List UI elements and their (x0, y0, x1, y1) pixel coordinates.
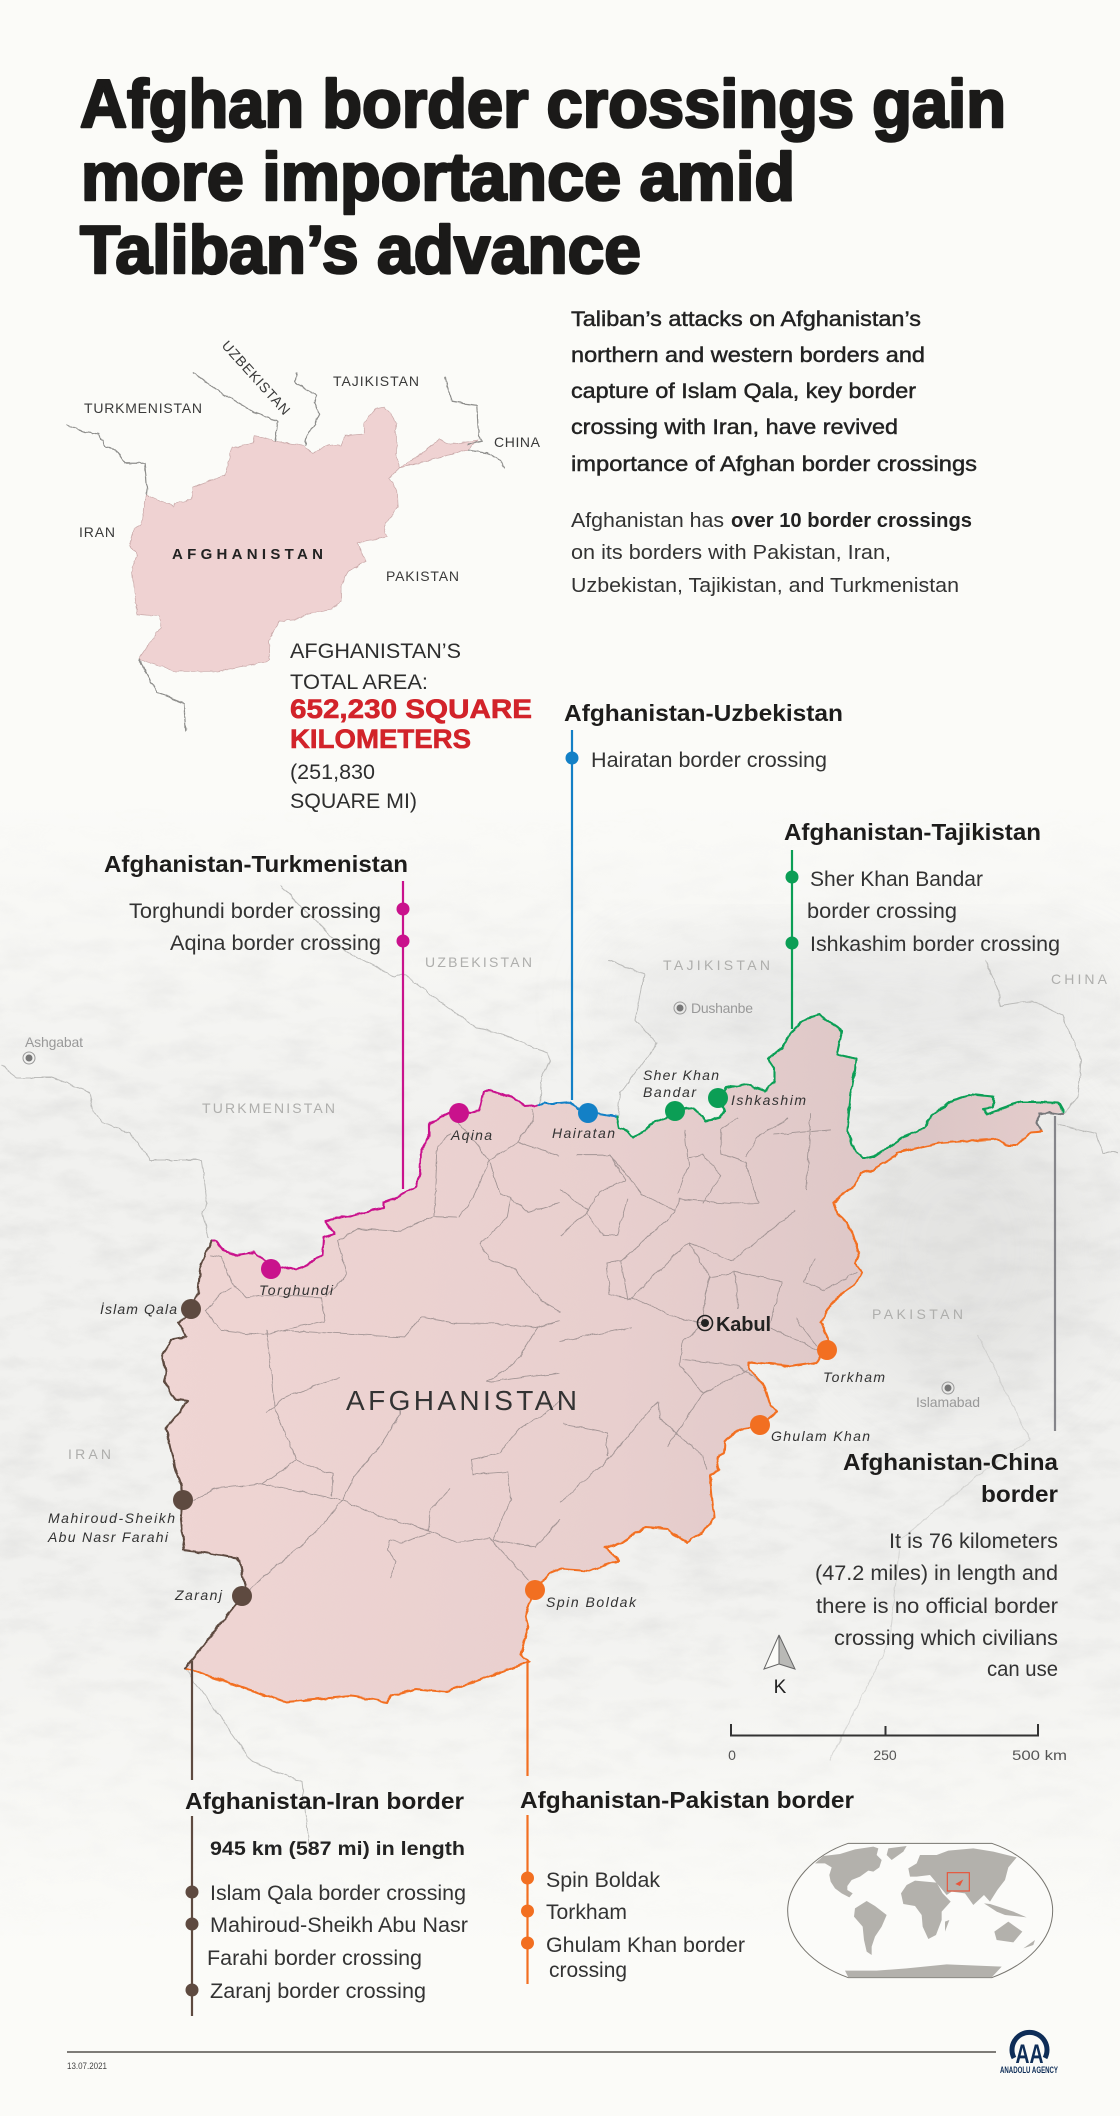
legend: Afghanistan-Iran border: Farahi border crossing (207, 1947, 422, 1970)
Anadolu Agency logo: AA (1016, 2039, 1044, 2069)
total area callout (290, 639, 532, 813)
scale bar: 0 (728, 1747, 736, 1763)
map country labels (68, 954, 1108, 1462)
crossing labels on map: Torkham (823, 1369, 885, 1385)
crossing labels on map: Hairatan (552, 1125, 615, 1141)
leader lines (192, 730, 1055, 2016)
legend: Afghanistan-China border (815, 1449, 1058, 1681)
map country labels: AFGHANISTAN (346, 1385, 577, 1416)
legend: Afghanistan-Pakistan border: Ghulam Khan border (546, 1934, 745, 1957)
legend: Afghanistan-Tajikistan (784, 819, 1060, 956)
title: more importance amid (81, 139, 795, 215)
capital cities: Dushanbe (691, 1000, 753, 1016)
map background terrain (0, 904, 1120, 1794)
border: Afghanistan-Tajikistan (617, 1015, 1063, 1157)
legend: Afghanistan-Uzbekistan (564, 700, 843, 772)
intro text bold: importance of Afghan border crossings (571, 453, 977, 476)
border: Afghanistan-Pakistan (185, 1131, 1042, 1702)
crossing labels on map: Torghundi (259, 1282, 334, 1298)
title (80, 66, 1006, 288)
map country labels: CHINA (1051, 971, 1108, 987)
locator map of Afghanistan: IRAN (79, 524, 115, 540)
date: 13.07.2021 (67, 2061, 107, 2072)
scale bar: 500 km (1012, 1747, 1067, 1763)
capital cities (23, 1000, 980, 1410)
total area callout: SQUARE MI) (290, 789, 417, 813)
legend: Afghanistan-Tajikistan: Sher Khan Bandar (810, 868, 983, 891)
legend: Afghanistan-Tajikistan: Ishkashim border crossing (810, 933, 1060, 956)
capital cities: Kabul (716, 1314, 771, 1336)
intro text regular (571, 510, 972, 597)
legend: Afghanistan-Pakistan border: Torkham (546, 1901, 627, 1924)
border: Afghanistan-China (1037, 1112, 1063, 1131)
total area callout: AFGHANISTAN’S (290, 639, 461, 663)
legend: Afghanistan-China border: can use (987, 1658, 1058, 1681)
legend: Afghanistan-China border: crossing which civilians (834, 1627, 1058, 1650)
locator map of Afghanistan: UZBEKISTAN (219, 337, 294, 418)
title: Afghan border crossings gain (80, 66, 1006, 142)
legend: Afghanistan-China border: border (981, 1481, 1058, 1507)
legend: Afghanistan-Pakistan border: Afghanistan-Pakistan border (520, 1787, 854, 1813)
crossing markers on map (173, 1088, 837, 1606)
neighbouring country borders (2, 885, 1118, 1844)
legend: Afghanistan-China border: It is 76 kilometers (889, 1530, 1058, 1553)
crossing labels on map: Mahiroud-Sheikh (48, 1510, 175, 1526)
locator map of Afghanistan: TAJIKISTAN (333, 373, 419, 389)
map country labels: TURKMENISTAN (202, 1100, 335, 1116)
map country labels: TAJIKISTAN (663, 957, 770, 973)
capital cities: Ashgabat (25, 1034, 83, 1050)
crossing labels on map: Bandar (643, 1084, 697, 1100)
Anadolu Agency logo (1000, 2032, 1058, 2075)
intro text bold (571, 308, 977, 476)
locator map of Afghanistan: TURKMENISTAN (84, 400, 202, 416)
legend: Afghanistan-Turkmenistan: Afghanistan-Turkmenistan (104, 851, 408, 877)
legend: Afghanistan-Turkmenistan (104, 851, 410, 955)
legend: Afghanistan-Iran border: Zaranj border crossing (210, 1980, 426, 2003)
crossing labels on map: Spin Boldak (546, 1594, 637, 1610)
locator map of Afghanistan: CHINA (494, 434, 541, 450)
map: road network west (193, 1109, 560, 1590)
total area callout: 652,230 SQUARE (290, 694, 532, 724)
north arrow: K (774, 1677, 787, 1698)
legend: Afghanistan-Iran border: Afghanistan-Iran border (185, 1788, 464, 1814)
intro text bold: Taliban’s attacks on Afghanistan’s (571, 308, 921, 331)
intro text bold: capture of Islam Qala, key border (571, 380, 916, 403)
legend: Afghanistan-Tajikistan: Afghanistan-Tajikistan (784, 819, 1041, 845)
scale bar (728, 1724, 1067, 1763)
legend: Afghanistan-Pakistan border: Spin Boldak (546, 1869, 661, 1892)
title: Taliban’s advance (80, 212, 641, 288)
border: Afghanistan-Turkmenistan (211, 1090, 539, 1270)
intro text regular: Uzbekistan, Tajikistan, and Turkmenistan (571, 575, 959, 597)
map country labels: PAKISTAN (872, 1306, 963, 1322)
crossing labels on map: Abu Nasr Farahi (47, 1529, 169, 1545)
crossing labels on map: Zaranj (174, 1587, 223, 1603)
crossing labels on map (47, 1067, 885, 1610)
locator map of Afghanistan: AFGHANISTAN (172, 546, 323, 563)
crossing labels on map: Ghulam Khan (771, 1428, 870, 1444)
total area callout: KILOMETERS (290, 724, 471, 754)
legend: Afghanistan-Iran border: 945 km (587 mi) in length (210, 1839, 465, 1860)
crossing labels on map: Aqina (450, 1127, 492, 1143)
map country labels: UZBEKISTAN (425, 954, 532, 970)
footer rule (67, 2051, 996, 2053)
legend: Afghanistan-Uzbekistan: Afghanistan-Uzbekistan (564, 700, 843, 726)
total area callout: (251,830 (290, 760, 375, 784)
north arrow (764, 1635, 795, 1698)
legend: Afghanistan-Iran border: Mahiroud-Sheikh Abu Nasr (210, 1914, 468, 1937)
legend: Afghanistan-Uzbekistan: Hairatan border crossing (591, 749, 827, 772)
intro text bold: northern and western borders and (571, 344, 925, 367)
legend: Afghanistan-Iran border (185, 1788, 468, 2003)
Anadolu Agency logo: ANADOLU AGENCY (1000, 2065, 1058, 2075)
world locator map (788, 1843, 1053, 1978)
total area callout: TOTAL AREA: (290, 670, 428, 694)
legend: Afghanistan-Turkmenistan: Torghundi border crossing (129, 900, 381, 923)
crossing labels on map: Ishkashim (731, 1092, 806, 1108)
legend: Afghanistan-China border: (47.2 miles) in length and (815, 1562, 1058, 1585)
legend: Afghanistan-Turkmenistan: Aqina border crossing (170, 932, 381, 955)
legend: Afghanistan-China border: Afghanistan-China (843, 1449, 1058, 1475)
map: Afghanistan country fill (162, 1015, 1063, 1702)
legend: Afghanistan-Pakistan border (520, 1787, 854, 1982)
crossing labels on map: İslam Qala (100, 1301, 177, 1317)
border: Afghanistan-Uzbekistan (539, 1102, 617, 1117)
map group: Afghanistan, roads, borders (2, 885, 1118, 1844)
capital cities: Islamabad (916, 1394, 980, 1410)
crossing labels on map: Sher Khan (643, 1067, 719, 1083)
legend: Afghanistan-Iran border: Islam Qala border crossing (210, 1882, 466, 1905)
intro text regular: Afghanistan has (571, 510, 724, 532)
map country labels: IRAN (68, 1446, 111, 1462)
locator map of Afghanistan (66, 337, 541, 731)
border: Afghanistan-Iran (162, 1241, 245, 1668)
locator map of Afghanistan: PAKISTAN (386, 568, 459, 584)
legend: Afghanistan-Pakistan border: crossing (549, 1959, 627, 1982)
legend: Afghanistan-Tajikistan: border crossing (807, 900, 957, 923)
legend: Afghanistan-China border: there is no official border (816, 1595, 1058, 1618)
intro text regular: on its borders with Pakistan, Iran, (571, 542, 891, 564)
intro text regular: over 10 border crossings (731, 510, 972, 532)
intro text bold: crossing with Iran, have revived (571, 416, 898, 439)
map: road network east (560, 1114, 856, 1502)
scale bar: 250 (873, 1747, 897, 1763)
